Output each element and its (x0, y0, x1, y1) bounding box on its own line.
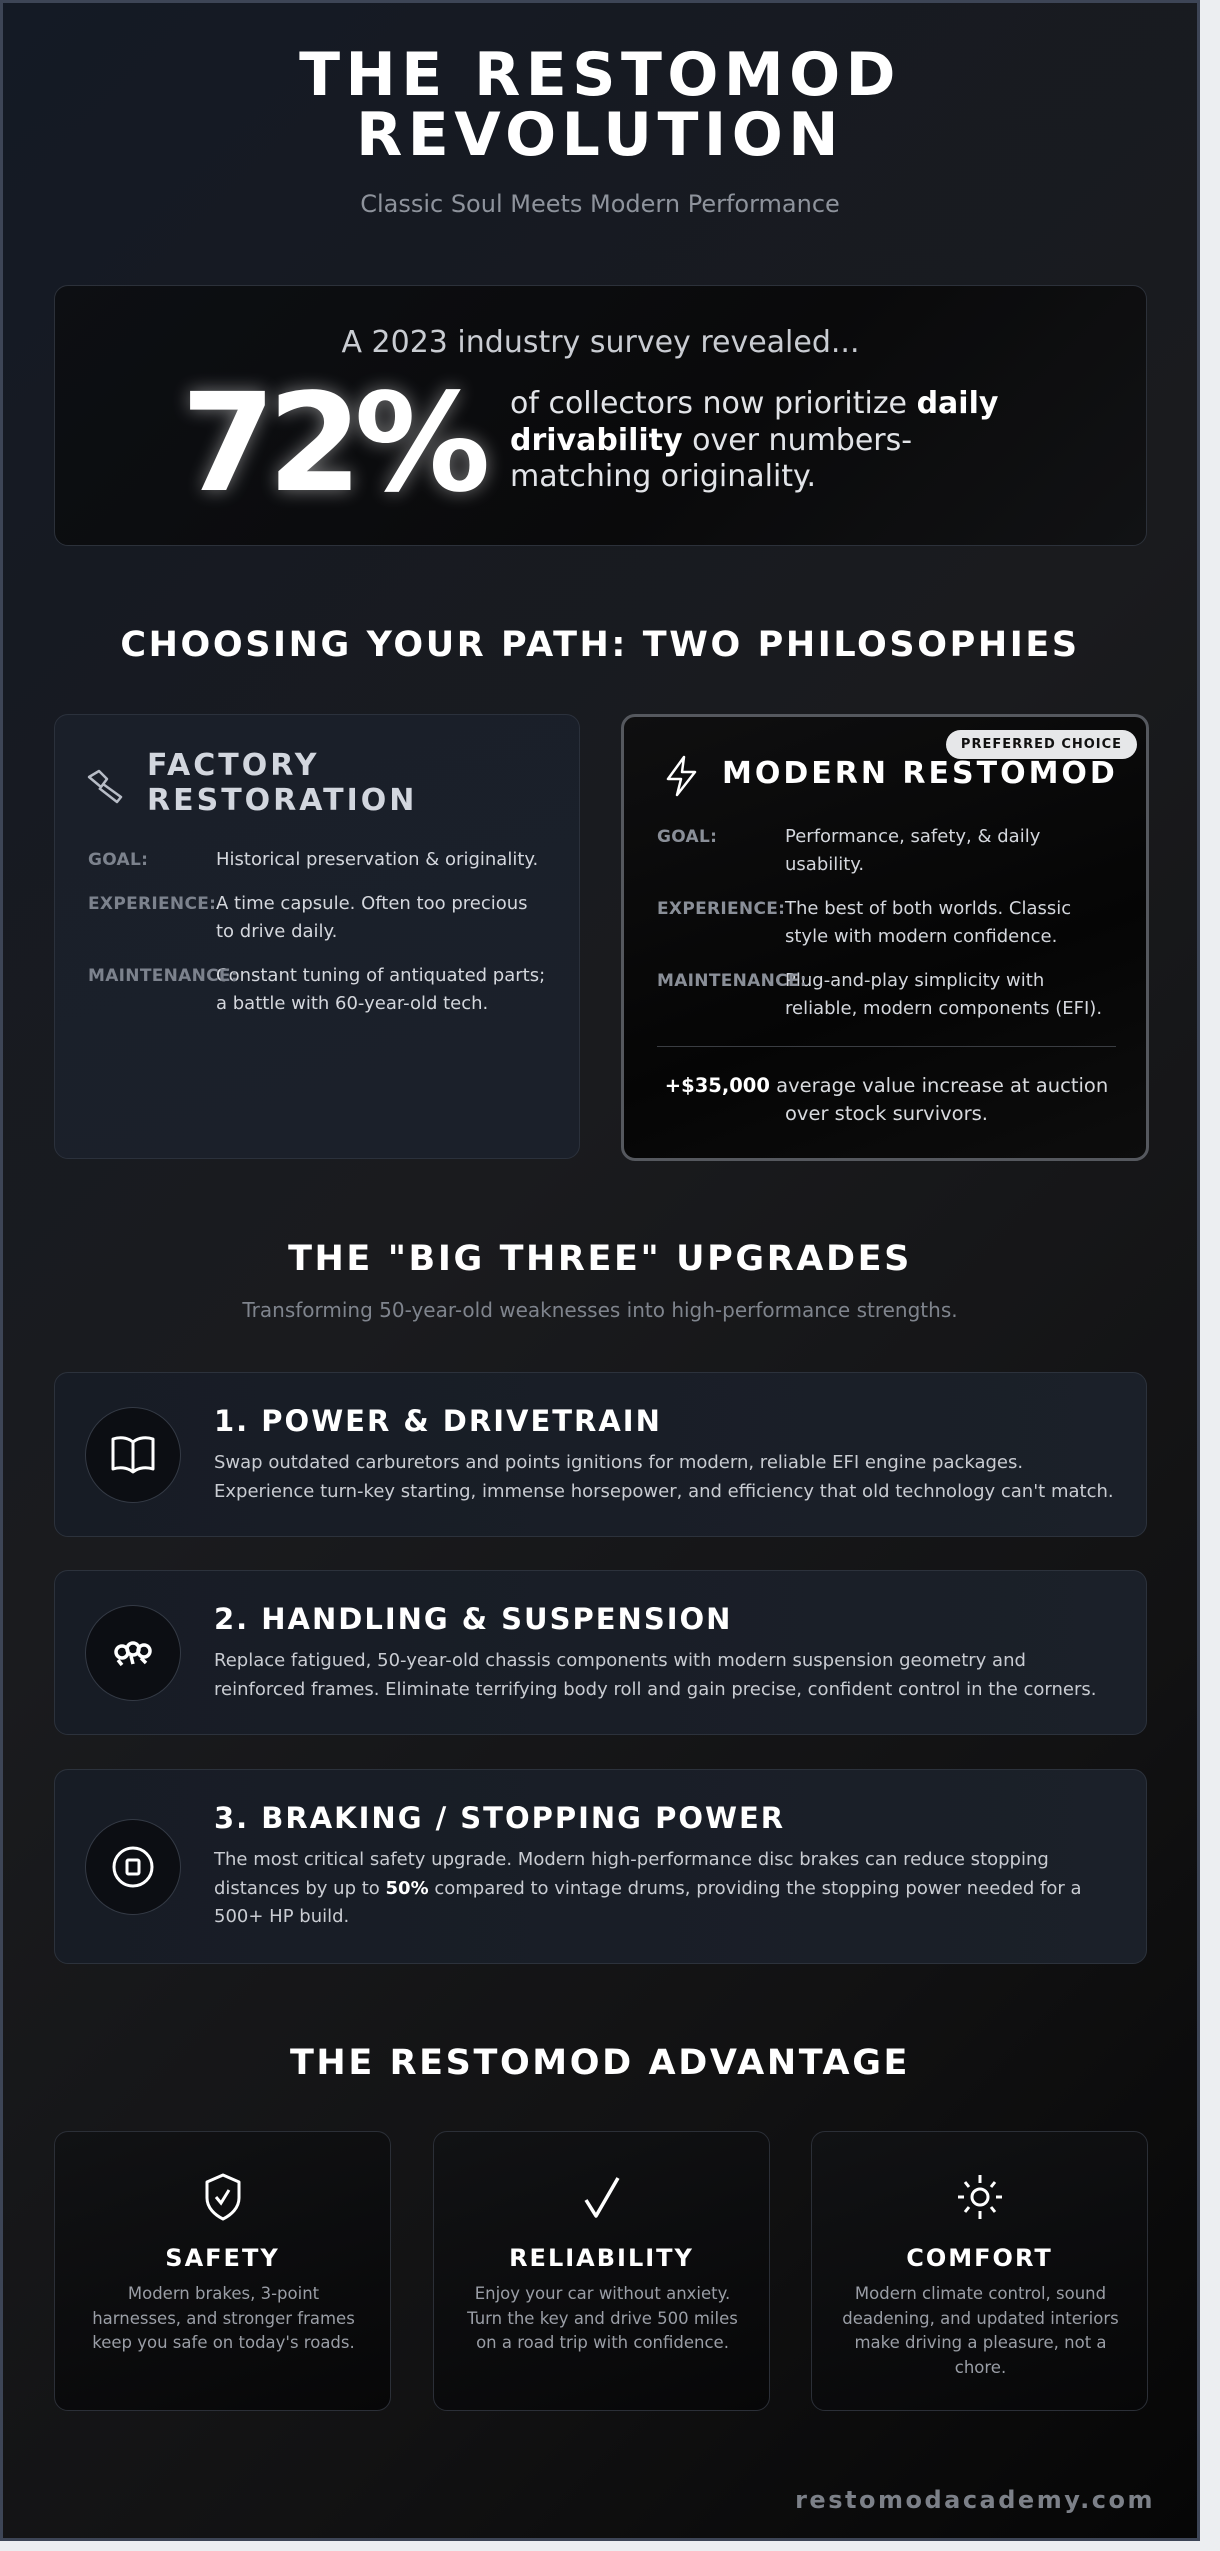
icon: bolt (666, 756, 696, 796)
heading: advantage: THE RESTOMOD ADVANTAGE (290, 2043, 910, 2083)
panel: comfort: COMFORT (906, 2244, 1053, 2272)
subtitle: Classic Soul Meets Modern Performance (360, 190, 840, 218)
value callout: +$35,000 average value increase at auction over stock survivors. (665, 1074, 1108, 1125)
heading: big three: THE "BIG THREE" UPGRADES (288, 1239, 912, 1279)
icon: brake disc (85, 1819, 181, 1915)
panel: upgrade 3: The most critical safety upgrade. Modern high-performance disc brakes can reduce stopping distances by up to 50% compared to vintage drums, providing the stopping power needed for a 500+ HP build. (214, 1849, 1082, 1927)
panel: upgrade 3 (54, 1769, 1147, 1964)
panel: factory restoration: EXPERIENCE: (88, 894, 216, 914)
title (299, 40, 901, 170)
survey intro: A 2023 industry survey revealed... (341, 325, 860, 360)
panel: upgrade 2: 2. HANDLING & SUSPENSION (214, 1602, 732, 1636)
panel: reliability: Enjoy your car without anxiety. Turn the key and drive 500 miles on a road trip with confidence. (467, 2284, 738, 2352)
heading: FACTORY (147, 748, 319, 783)
rows: Historical preservation & originality. (216, 849, 538, 870)
stat description: of collectors now prioritize daily drivability over numbers-matching originality. (510, 386, 998, 494)
panel: modern restomod (621, 714, 1149, 1161)
panel: comfort: Modern climate control, sound deadening, and updated interiors make driving a pleasure, not a chore. (842, 2284, 1119, 2376)
panel: safety: SAFETY (165, 2244, 280, 2272)
heading: RESTORATION (147, 783, 417, 818)
panel: upgrade 2: Replace fatigued, 50-year-old chassis components with modern suspension geometry and reinforced frames. Eliminate terrifying body roll and gain precise, confident control in the corners. (214, 1650, 1096, 1700)
rows: GOAL: (88, 850, 148, 870)
panel: reliability: RELIABILITY (509, 2244, 694, 2272)
heading (147, 748, 417, 818)
panel: reliability (433, 2131, 770, 2411)
heading: MODERN RESTOMOD (722, 756, 1118, 791)
panel: modern restomod: The best of both worlds. Classic style with modern confidence. (785, 898, 1071, 947)
rows: Performance, safety, & daily usability. (785, 826, 1040, 875)
rows: GOAL: (657, 827, 717, 847)
title: REVOLUTION (356, 100, 844, 170)
icon: book (85, 1407, 181, 1503)
panel: modern restomod: EXPERIENCE: (657, 899, 785, 919)
icon: check (584, 2177, 620, 2218)
badge: PREFERRED CHOICE (961, 737, 1122, 752)
icon: sun (958, 2175, 1002, 2219)
big stat: 72% (181, 365, 483, 523)
icon: suspension (85, 1605, 181, 1701)
icon: shield (206, 2174, 240, 2220)
badge (946, 730, 1137, 759)
panel: comfort (811, 2131, 1148, 2411)
panel: modern restomod: Plug-and-play simplicity with reliable, modern components (EFI). (785, 970, 1102, 1019)
panel: upgrade 1: Swap outdated carburetors and points ignitions for modern, reliable EFI engine packages. Experience turn-key starting, immense horsepower, and efficiency that old technology can't match. (214, 1452, 1114, 1502)
panel: modern restomod: MAINTENANCE: (657, 971, 807, 991)
panel: safety (54, 2131, 391, 2411)
subheading: Transforming 50-year-old weaknesses into high-performance strengths. (242, 1298, 958, 1322)
panel: survey stat (54, 285, 1147, 546)
panel: factory restoration: MAINTENANCE: (88, 966, 238, 986)
title: THE RESTOMOD (299, 40, 901, 110)
panel: upgrade 3: 3. BRAKING / STOPPING POWER (214, 1801, 785, 1835)
panel: safety: Modern brakes, 3-point harnesses, and stronger frames keep you safe on today's roads. (92, 2284, 355, 2352)
panel: upgrade 1 (54, 1372, 1147, 1537)
footer url: restomodacademy.com (795, 2486, 1155, 2514)
panel: factory restoration (54, 714, 580, 1159)
icon: wrench (88, 770, 122, 804)
panel: upgrade 1: 1. POWER & DRIVETRAIN (214, 1404, 662, 1438)
panel: factory restoration: A time capsule. Often too precious to drive daily. (216, 893, 528, 942)
panel: factory restoration: Constant tuning of antiquated parts; a battle with 60-year-old tech. (216, 965, 545, 1014)
heading: philosophies: CHOOSING YOUR PATH: TWO PHILOSOPHIES (120, 625, 1080, 665)
panel: upgrade 2 (54, 1570, 1147, 1735)
rows (657, 826, 1040, 875)
divider (657, 1046, 1116, 1047)
